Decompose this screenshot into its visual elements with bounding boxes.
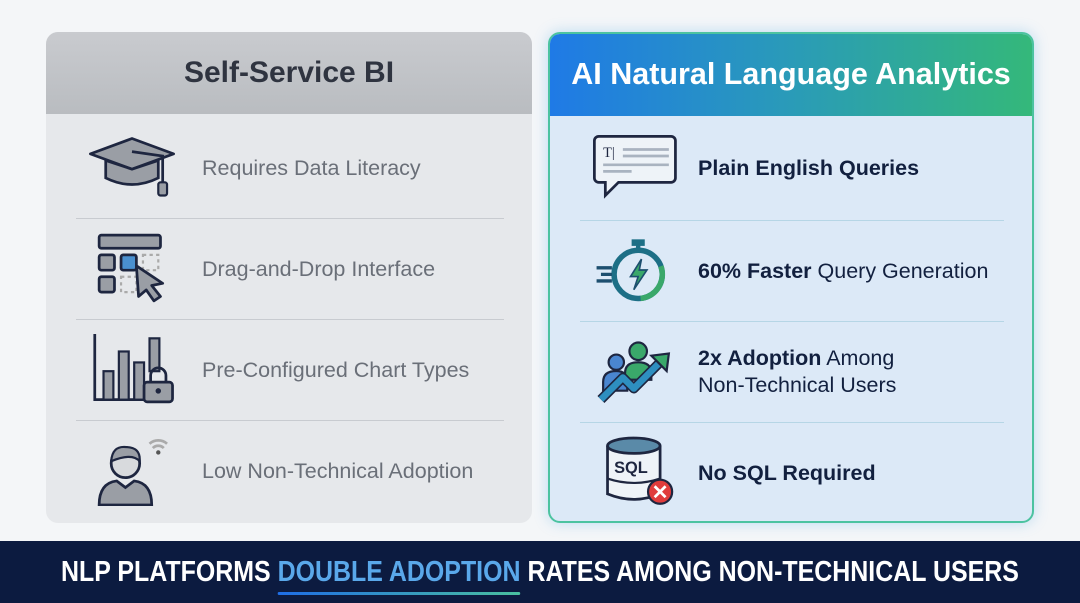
row: data literacy [89, 137, 421, 197]
icon: graduation cap [89, 137, 175, 197]
text: Non-Technical Users [698, 373, 896, 397]
panel: self-service BI [46, 32, 532, 523]
icon: locked bar chart [93, 334, 174, 404]
heading: self-service BI: Self-Service BI [184, 56, 394, 89]
icon: users with up arrow [598, 341, 670, 403]
text: No SQL Required [698, 460, 876, 484]
icon: user with weak signal [98, 439, 168, 506]
icon: SQL database with x [606, 436, 674, 505]
text: 2x Adoption Among [698, 346, 894, 370]
text: Drag-and-Drop Interface [202, 256, 435, 280]
banner: takeaway [0, 541, 1080, 603]
text: Requires Data Literacy [202, 156, 421, 180]
heading: AI natural language analytics [550, 32, 1032, 116]
row: no SQL [606, 436, 876, 505]
row: drag and drop [98, 234, 435, 302]
icon: SQL database with x: SQL [614, 459, 648, 477]
icon: stopwatch [596, 239, 666, 302]
text: Query Generation [818, 258, 988, 282]
text: Pre-Configured Chart Types [202, 358, 469, 382]
text [698, 258, 988, 282]
row: chart types [93, 334, 469, 404]
row: plain English [593, 135, 919, 199]
text: Plain English Queries [698, 156, 919, 180]
heading: self-service BI [46, 32, 532, 114]
icon: chat bubble: T| [603, 145, 615, 161]
row: faster query [596, 239, 988, 302]
panel: AI natural language analytics [548, 32, 1034, 523]
banner: takeaway: NLP PLATFORMS DOUBLE ADOPTION RATES AMONG NON-TECHNICAL USERS [61, 556, 1019, 588]
text: Low Non-Technical Adoption [202, 458, 473, 482]
row: adoption [598, 341, 896, 403]
row: low adoption [98, 439, 473, 506]
icon: drag-drop grid [98, 234, 164, 302]
text: 60% Faster [698, 258, 812, 282]
icon: chat bubble [593, 135, 677, 199]
text [698, 346, 896, 397]
heading: AI natural language analytics: AI Natural Language Analytics [571, 56, 1011, 90]
